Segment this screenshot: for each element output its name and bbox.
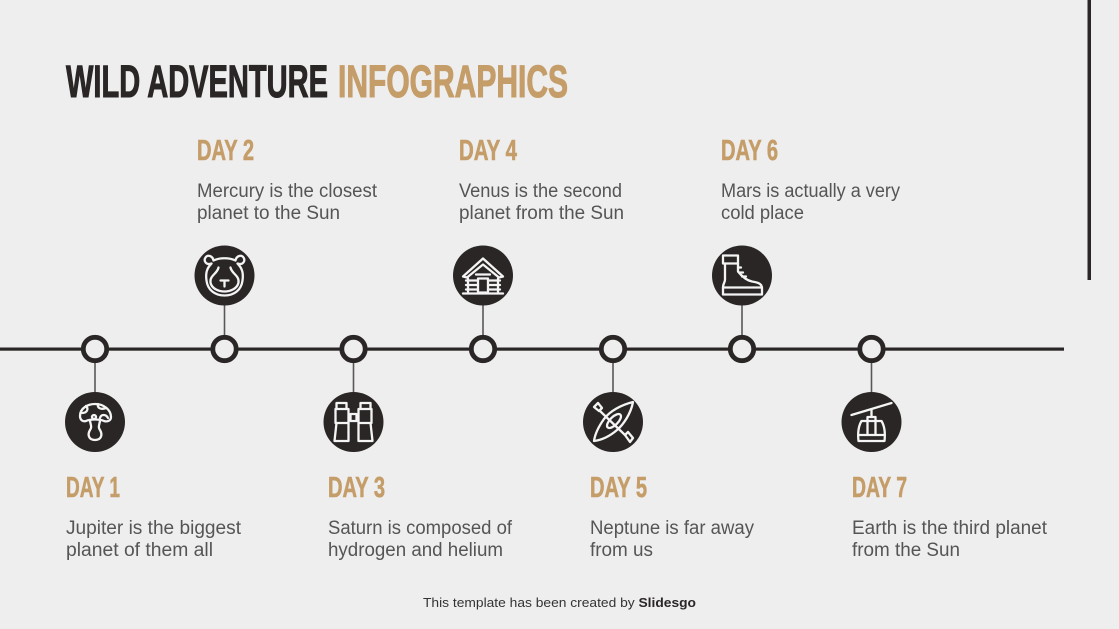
- text block: day 4: Venus is the second: [459, 181, 622, 202]
- text block: day 2: DAY 2: [197, 135, 254, 167]
- text block: day 4: DAY 4: [459, 135, 517, 167]
- text block: day 2: Mercury is the closest: [197, 181, 378, 202]
- text block: day 6: Mars is actually a very: [721, 181, 900, 202]
- icon: binoculars: [324, 392, 384, 452]
- text block: day 3: [328, 472, 513, 561]
- text block: day 1: DAY 1: [66, 472, 120, 504]
- icon: bear: [194, 246, 254, 306]
- text block: day 7: [852, 472, 1048, 561]
- text block: day 3: DAY 3: [328, 472, 385, 504]
- text block: day 6: DAY 6: [721, 135, 778, 167]
- icon: cable car: [842, 392, 902, 452]
- text block: day 2: planet to the Sun: [197, 203, 340, 224]
- text block: day 1: [66, 472, 242, 561]
- icon: mushroom: [65, 392, 125, 452]
- icon: kayak: [583, 392, 643, 452]
- text block: day 4: [459, 135, 624, 224]
- text block: day 5: from us: [590, 540, 653, 561]
- text block: day 5: Neptune is far away: [590, 518, 754, 539]
- text block: day 2: [197, 135, 378, 224]
- text block: day 6: cold place: [721, 203, 804, 224]
- text block: day 5: [590, 472, 754, 561]
- text block: day 3: Saturn is composed of: [328, 518, 513, 539]
- text block: day 7: from the Sun: [852, 540, 960, 561]
- timeline: [0, 305, 1064, 393]
- text block: day 5: DAY 5: [590, 472, 647, 504]
- text block: day 7: Earth is the third planet: [852, 518, 1048, 539]
- text block: day 6: [721, 135, 900, 224]
- icon: boot: [712, 246, 772, 306]
- text block: day 1: planet of them all: [66, 540, 213, 561]
- title: INFOGRAPHICS: [338, 56, 568, 107]
- title: WILD ADVENTURE: [66, 56, 328, 107]
- text block: day 4: planet from the Sun: [459, 203, 624, 224]
- footer credit: This template has been created by Slidesgo: [423, 595, 696, 610]
- text block: day 3: hydrogen and helium: [328, 540, 503, 561]
- text block: day 7: DAY 7: [852, 472, 907, 504]
- text block: day 1: Jupiter is the biggest: [66, 518, 242, 539]
- icon: log cabin: [453, 246, 513, 306]
